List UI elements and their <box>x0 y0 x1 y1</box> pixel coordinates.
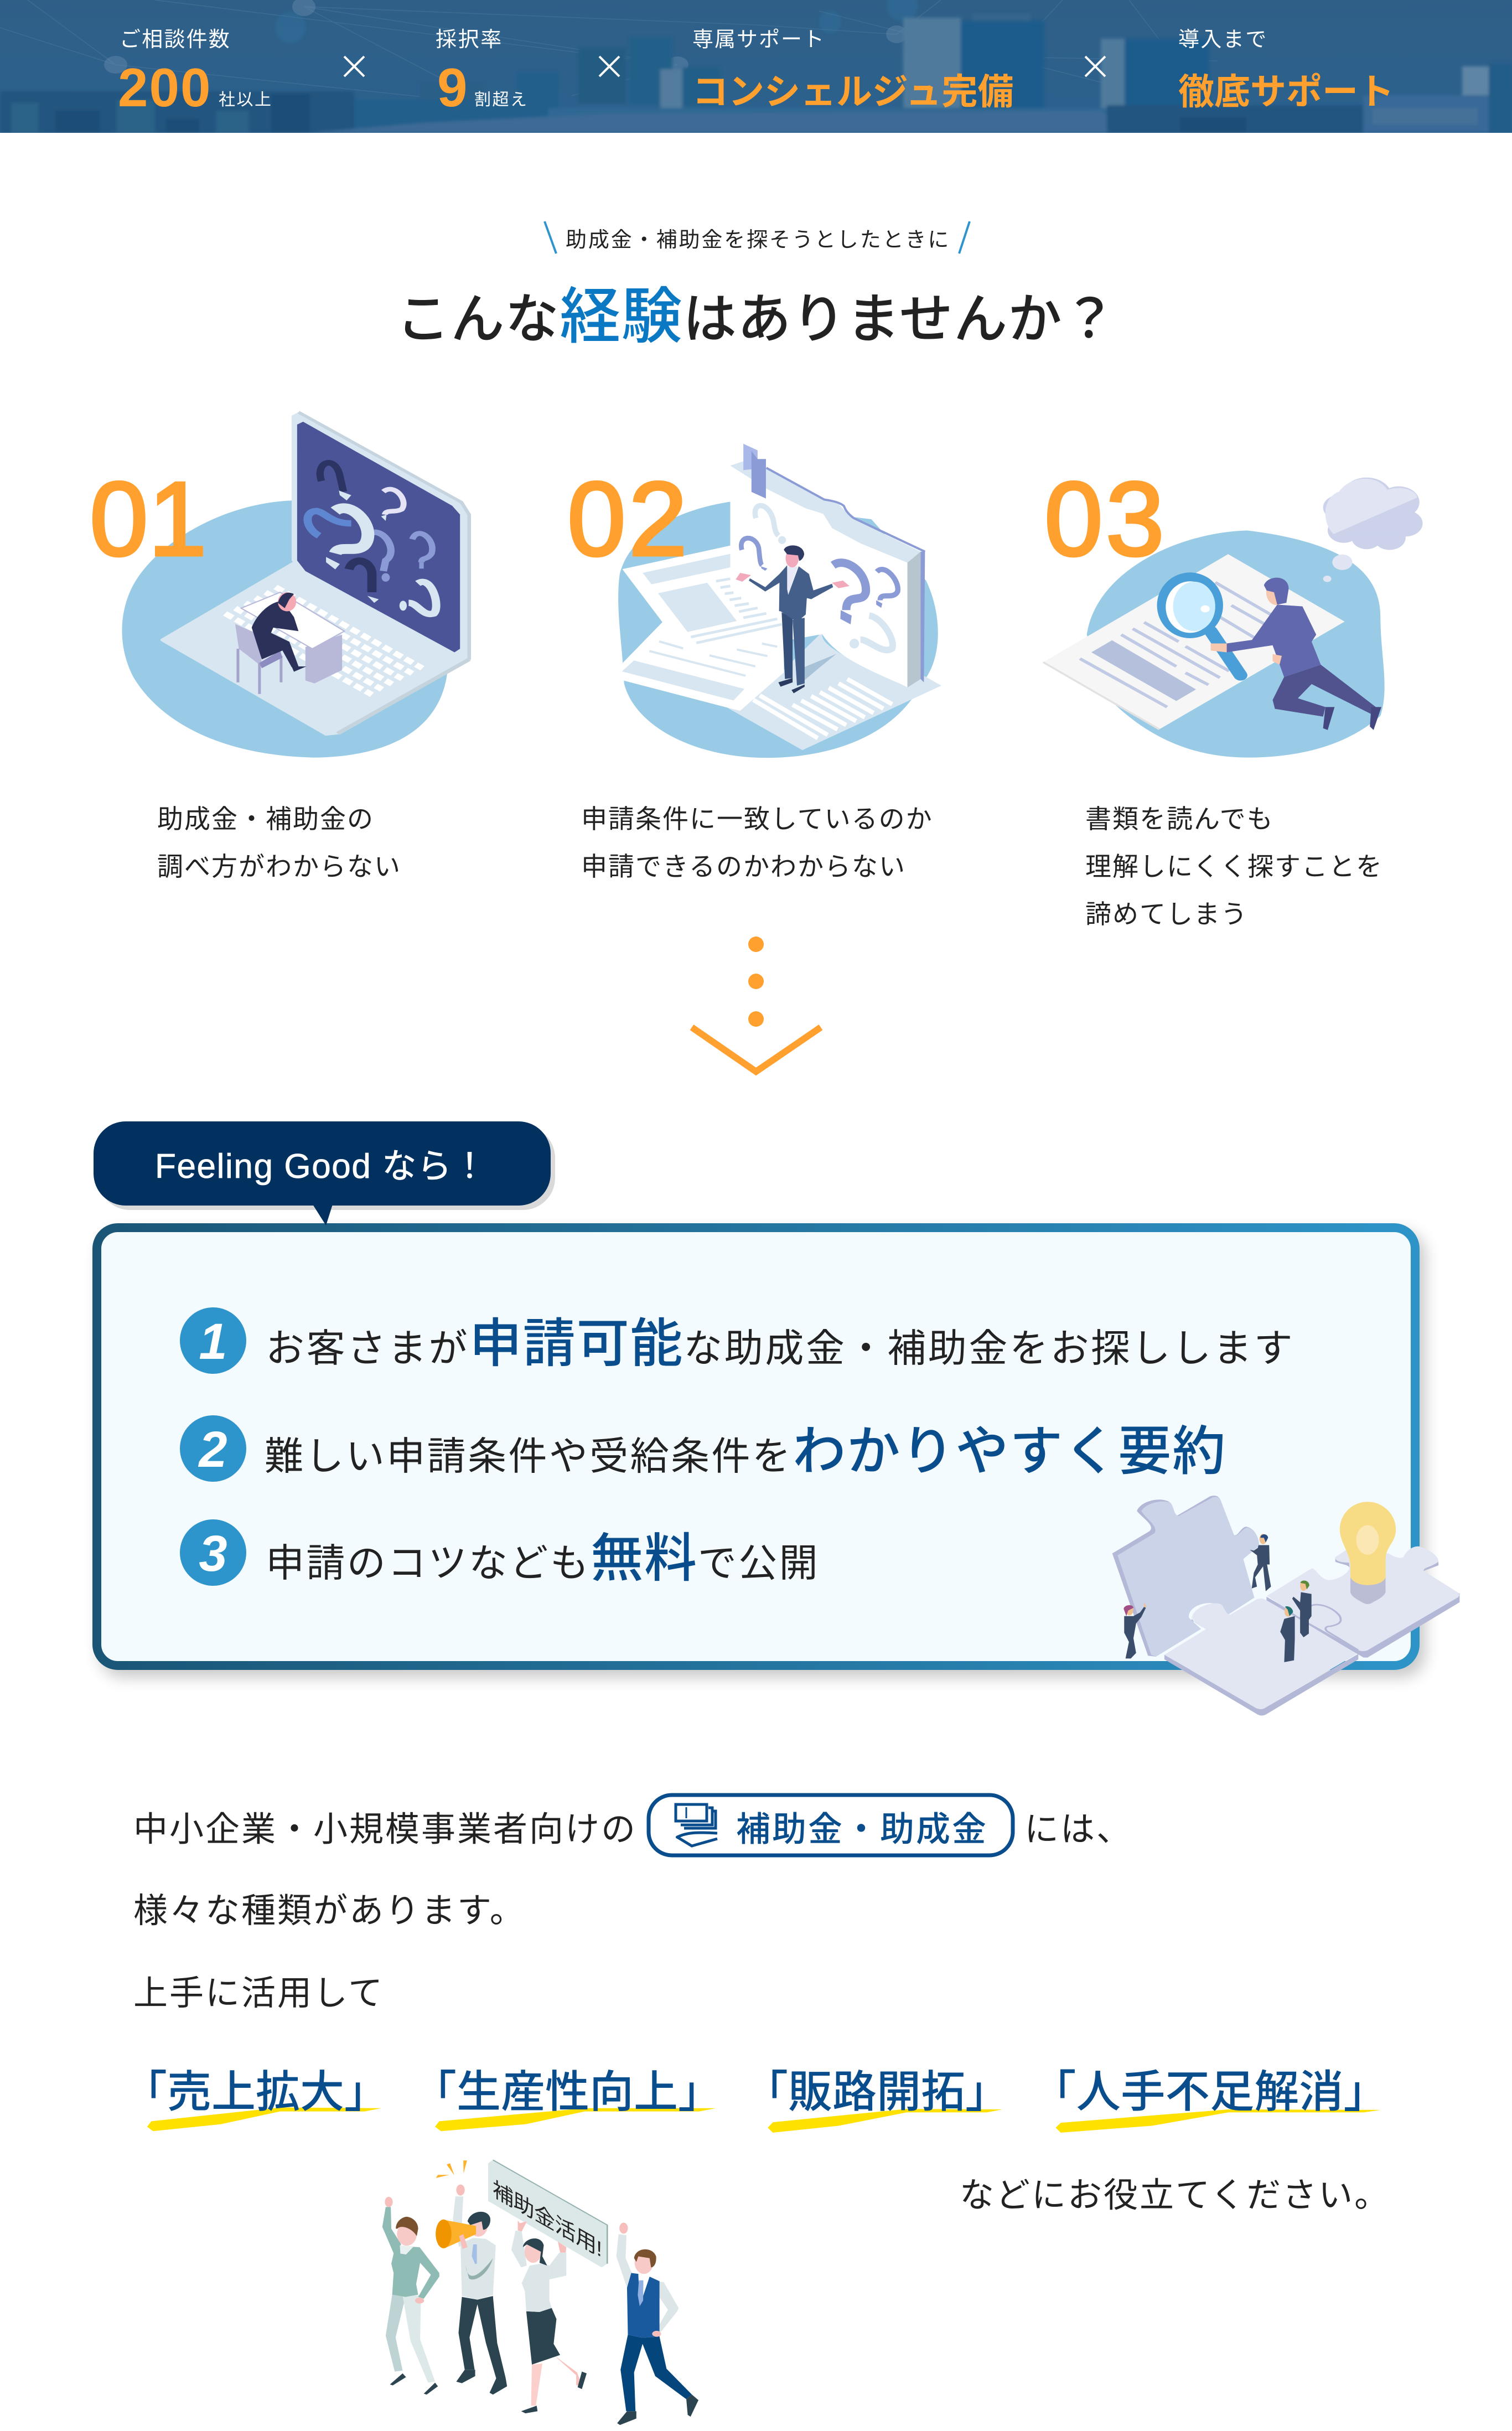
stat: dedicated support: コンシェルジュ完備 <box>692 71 1013 112</box>
person: megaphone <box>436 2160 507 2394</box>
header banner <box>0 0 1512 133</box>
description 03: 諦めてしまう <box>1085 899 1248 929</box>
description 01: 助成金・補助金の <box>157 804 374 834</box>
stat: dedicated support: 専属サポート <box>692 28 825 51</box>
panel: case 03 <box>1043 461 1423 929</box>
stat: consultations <box>120 29 270 107</box>
stat: consultations: 社以上 <box>219 91 272 109</box>
arrow: dotted down arrow <box>692 937 821 1072</box>
stat: consultations: 200 <box>118 57 212 118</box>
keywords with yellow highlights: 「生産性向上」 <box>412 2067 722 2117</box>
closing text: などにお役立てください。 <box>960 2176 1390 2215</box>
bubble tail <box>313 1204 333 1225</box>
pill: subsidies: 補助金・助成金 <box>736 1811 988 1849</box>
description 03: 理解しにくく探すことを <box>1085 852 1383 881</box>
intro text block: 上手に活用して <box>133 1974 384 2013</box>
section subheading: 助成金・補助金を探そうとしたときに <box>566 229 950 252</box>
stat: consultations: ご相談件数 <box>120 28 231 51</box>
stat: acceptance rate: 採択率 <box>436 28 503 51</box>
description 03: 書類を読んでも <box>1085 804 1274 834</box>
illustration: laptop and worried person <box>122 412 469 758</box>
stat: until introduction <box>1178 28 1394 112</box>
stat: acceptance rate: 9 <box>437 57 468 118</box>
illustration: puzzle team with light bulb <box>1112 1496 1459 1716</box>
person: teal sweater <box>382 2197 439 2394</box>
stat: acceptance rate: 割超え <box>474 91 528 109</box>
description 01 <box>157 804 401 881</box>
keywords with yellow highlights: 「販路開拓」 <box>744 2067 1009 2117</box>
pill: subsidies <box>649 1795 1013 1855</box>
intro text block <box>133 1795 1132 2013</box>
title: こんな経験はありませんか？ <box>396 283 1117 351</box>
description 02 <box>581 804 933 881</box>
icon: multiply 3 <box>1085 56 1105 76</box>
speech bubble: Feeling Good <box>94 1121 555 1210</box>
description 02: 申請条件に一致しているのか <box>581 804 933 834</box>
benefit 3: 3 <box>199 1525 227 1582</box>
stat: dedicated support <box>692 28 1013 112</box>
benefit 2: 難しい申請条件や受給条件をわかりやすく要約 <box>265 1422 1226 1481</box>
number 03: 03 <box>1044 461 1164 578</box>
icon: multiply 1 <box>344 56 364 76</box>
illustration: magnifier over document <box>1043 478 1423 758</box>
person: blue vest <box>617 2223 698 2425</box>
number 02: 02 <box>567 461 687 578</box>
intro text block: には、 <box>1024 1811 1132 1849</box>
intro text block: 様々な種類があります。 <box>133 1892 526 1930</box>
keywords with yellow highlights: 「売上拡大」 <box>123 2067 389 2117</box>
intro text block: 中小企業・小規模事業者向けの <box>133 1811 637 1849</box>
person: sign holder <box>511 2221 587 2413</box>
keywords with yellow highlights: 「人手不足解消」 <box>1032 2067 1388 2117</box>
illustration: documents and person with question marks <box>618 444 941 758</box>
benefit 1: お客さまが申請可能な助成金・補助金をお探しします <box>266 1315 1294 1373</box>
icon: yen in hand <box>676 1804 717 1846</box>
panel: case 02 <box>567 444 941 881</box>
highlight strokes <box>147 2107 1381 2133</box>
stat: acceptance rate <box>436 29 526 107</box>
number 01: 01 <box>90 461 207 578</box>
description 02: 申請できるのかわからない <box>581 852 906 881</box>
speech bubble: Feeling Good: Feeling Good なら！ <box>155 1147 488 1186</box>
section subheading <box>545 221 970 254</box>
illustration: team with megaphone and sign <box>382 2160 698 2425</box>
description 01: 調べ方がわからない <box>157 852 401 881</box>
panel: benefits box <box>97 1204 1425 1677</box>
stat: until introduction: 導入まで <box>1178 28 1268 51</box>
sign board <box>488 2160 607 2267</box>
icon: multiply 2 <box>599 56 619 76</box>
description 03 <box>1085 804 1383 929</box>
benefit 1: 1 <box>199 1313 227 1370</box>
keywords with yellow highlights <box>123 2067 1388 2133</box>
benefit 3: 申請のコツなども無料で公開 <box>266 1529 820 1588</box>
sign text: 補助金活用! <box>493 2176 602 2262</box>
benefit 2: 2 <box>198 1421 227 1478</box>
stat: until introduction: 徹底サポート <box>1178 71 1394 112</box>
panel: case 01 <box>90 412 469 881</box>
